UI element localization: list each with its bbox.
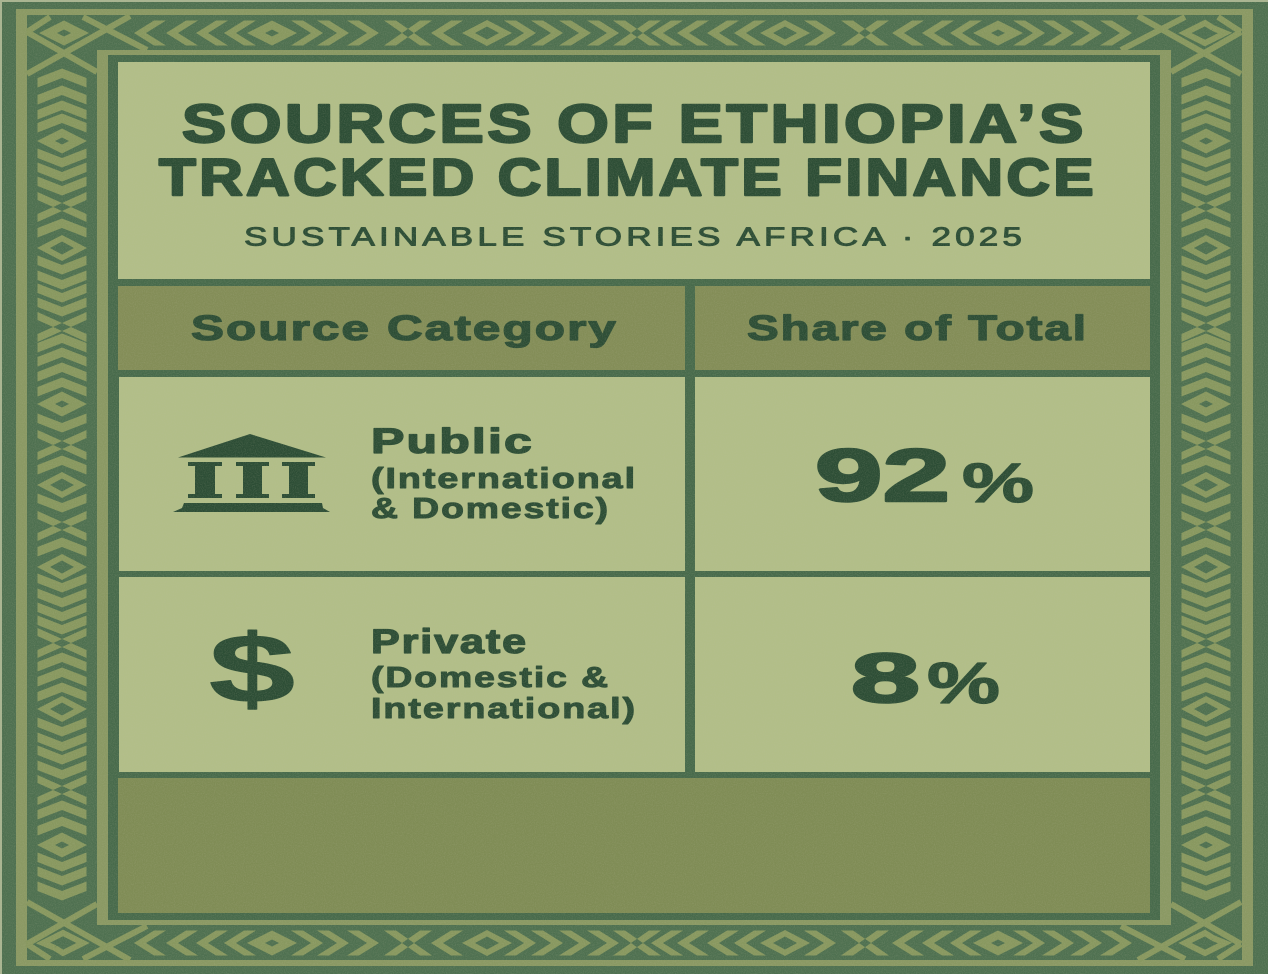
- value: 8 percent: 8: [851, 639, 920, 717]
- percent sign: %: [927, 651, 1000, 716]
- top-right corner knot: [1121, 16, 1241, 74]
- row: public share: [695, 377, 1150, 571]
- icon: government building: [173, 434, 330, 512]
- table header: share of total: [695, 286, 1150, 370]
- label: international and domestic: (International: [371, 463, 637, 495]
- panel: title: [118, 62, 1150, 279]
- label: international: International): [371, 693, 637, 725]
- empty footer band: [118, 778, 1150, 913]
- left pattern strip: [37, 68, 87, 900]
- top pattern strip: [134, 20, 1132, 46]
- bottom-right corner knot: [1121, 902, 1241, 960]
- label: public: Public: [371, 422, 534, 461]
- bottom-left corner knot: [27, 902, 147, 960]
- table header: share of total: Share of Total: [747, 309, 1088, 348]
- row: public source category: [119, 377, 685, 571]
- subtitle: SUSTAINABLE STORIES AFRICA · 2025: [244, 224, 1026, 252]
- label: private: Private: [371, 623, 528, 661]
- label: second line: & Domestic): [371, 493, 610, 525]
- table header: source category: Source Category: [191, 309, 618, 348]
- icon: dollar sign: $: [209, 614, 295, 723]
- title line 2: TRACKED CLIMATE FINANCE: [159, 149, 1097, 207]
- bottom pattern strip: [134, 930, 1132, 956]
- right pattern strip: [1181, 68, 1231, 900]
- top-left corner knot: [27, 16, 147, 74]
- label: domestic and: (Domestic &: [371, 662, 610, 694]
- row: private source category: [119, 577, 685, 772]
- row: private share: [695, 577, 1150, 772]
- table header: source category: [118, 286, 685, 370]
- title line 1: SOURCES OF ETHIOPIA’S: [182, 94, 1087, 154]
- value: 92 percent: 92: [815, 434, 950, 517]
- percent sign: %: [962, 451, 1034, 514]
